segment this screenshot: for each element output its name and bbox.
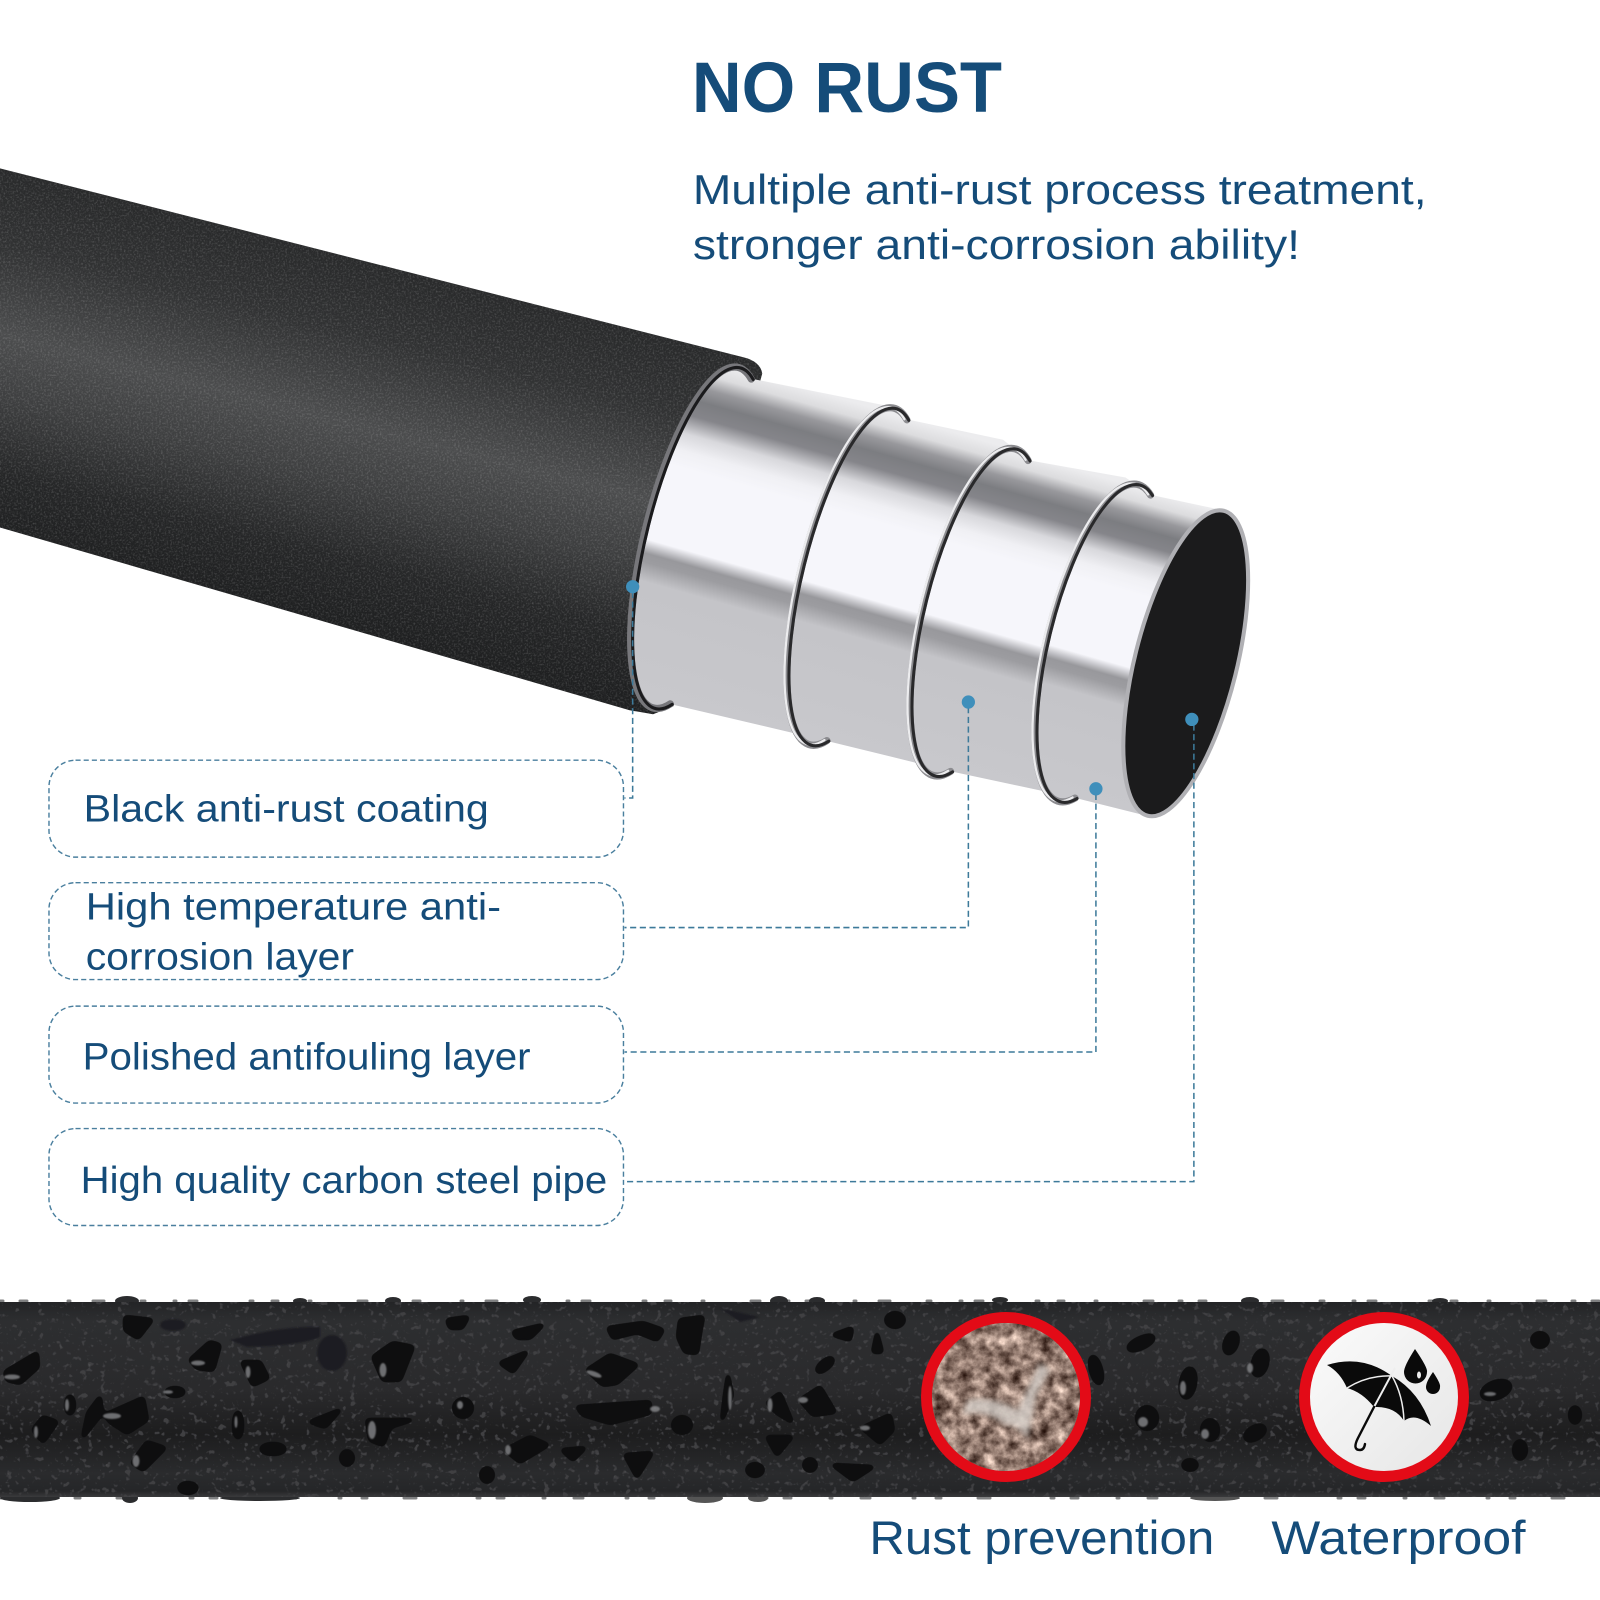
water drops bbox=[1404, 1349, 1440, 1394]
label: high temperature anti-corrosion layer bbox=[49, 883, 623, 980]
icon: waterproof umbrella badge bbox=[1299, 1312, 1469, 1482]
pale water film bbox=[160, 1308, 760, 1371]
edge droplets bbox=[0, 1296, 1600, 1503]
pipe cutaway illustration bbox=[0, 168, 1273, 828]
pipe opening bbox=[1098, 498, 1273, 828]
subtitle: stronger anti-corrosion ability! bbox=[693, 221, 1300, 268]
label: polished antifouling layer: Polished antifouling layer bbox=[83, 1035, 531, 1077]
layer rings bbox=[604, 355, 1154, 805]
black coated pipe body bbox=[0, 168, 762, 714]
large droplets bbox=[5, 1313, 1580, 1493]
polished metal layers bbox=[631, 367, 1248, 817]
label: high temperature anti-corrosion layer: corrosion layer bbox=[86, 935, 354, 977]
subtitle bbox=[693, 166, 1427, 268]
subtitle: Multiple anti-rust process treatment, bbox=[693, 166, 1427, 213]
label: high quality carbon steel pipe bbox=[49, 1129, 623, 1226]
label: black anti-rust coating bbox=[49, 760, 623, 857]
title: NO RUST bbox=[692, 48, 1002, 128]
label: polished antifouling layer bbox=[49, 1006, 623, 1103]
droplet highlights bbox=[4, 1360, 1496, 1467]
umbrella bbox=[1327, 1361, 1431, 1450]
callout lines and dots bbox=[624, 580, 1198, 1182]
caption: rust prevention: Rust prevention bbox=[869, 1512, 1214, 1564]
droplet speckle bbox=[0, 1302, 1600, 1497]
caption: waterproof: Waterproof bbox=[1271, 1512, 1527, 1564]
label: black anti-rust coating: Black anti-rust coating bbox=[84, 787, 489, 829]
label: high temperature anti-corrosion layer: High temperature anti- bbox=[86, 885, 501, 927]
wet black pipe band bbox=[0, 1296, 1600, 1503]
icon: rust texture badge bbox=[921, 1312, 1091, 1482]
feature icons bbox=[921, 1312, 1469, 1482]
label: high quality carbon steel pipe: High quality carbon steel pipe bbox=[81, 1159, 607, 1201]
